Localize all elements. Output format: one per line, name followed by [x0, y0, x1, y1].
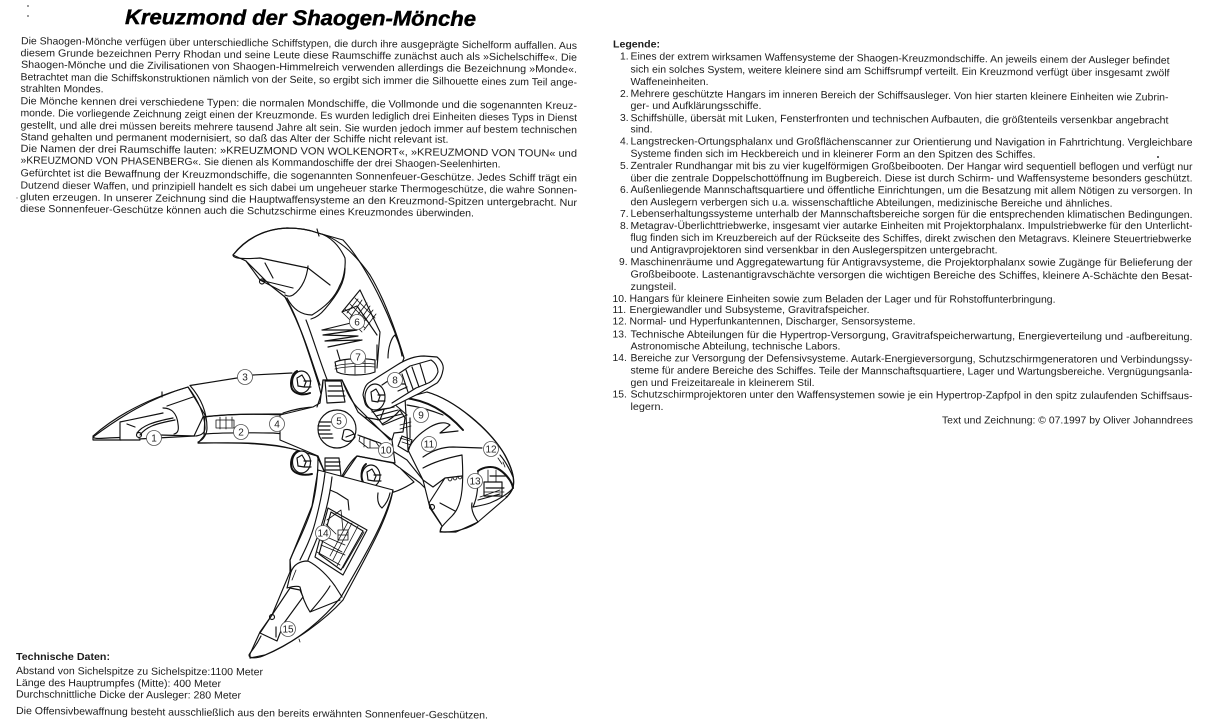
engine capsule — [363, 356, 443, 425]
legend: den Auslegern verbergen sich u.a. wissenschaftliche Abteilungen, medizinische Bereiche und ähnliches. — [630, 197, 1113, 210]
credit line: Text und Zeichnung: © 07.1997 by Oliver Johanndrees — [942, 416, 1193, 426]
legend: Mehrere geschützte Hangars im inneren Bereich der Schiffsausleger. Von hier starten kleinere Einheiten wie Zubrin- — [630, 89, 1169, 104]
legend: 8. — [620, 221, 629, 232]
legend: 12. — [612, 316, 627, 328]
legend: Metagrav-Überlichttriebwerke, insgesamt vier autarke Einheiten mit Projektorphalanx. Impulstriebwerke für den Unterlicht- — [630, 220, 1192, 232]
marker 3: 3 — [242, 372, 248, 384]
intro text block: gluten erzeugen. In unserer Zeichnung sind die Hauptwaffensysteme an den Kreuzmond-Spitzen untergebracht. Nur — [20, 192, 578, 209]
legend: flug finden sich im Kreuzbereich auf der Rückseite des Schiffes, direkt zwischen den Metagravs. Kleinere Steuertriebwerke — [630, 233, 1192, 245]
marker 11 — [422, 436, 436, 452]
legend: 7. — [620, 209, 629, 220]
legend: Großbeiboote. Lastenantigravschächte versorgen die wichtigen Bereiche des Schiffes, kleinere A-Schächte den Besat- — [630, 270, 1193, 282]
intro text block: Shaogen-Mönche und die Zivilisationen von Shaogen-Himmelreich verwenden allerdings die Bezeichnung »Monde«. — [21, 60, 577, 76]
marker 4: 4 — [274, 420, 280, 430]
legend: Maschinenräume und Aggregatewartung für Antigravsysteme, die Projektorphalanx sowie Zugänge für Belieferung der — [630, 257, 1193, 269]
technical data block — [16, 652, 264, 702]
marker 12: 12 — [485, 444, 497, 456]
legend: Langstrecken-Ortungsphalanx und Großflächenscanner zur Orientierung und Navigation in Fahrtrichtung. Vergleichbare — [630, 137, 1193, 149]
intro text block: Gefürchtet ist die Bewaffnung der Kreuzmondschiffe, die sogenannten Sonnenfeuer-Geschütze. Jedes Schiff trägt ein — [20, 168, 577, 185]
legend: 15. — [612, 390, 627, 400]
marker 2: 2 — [238, 428, 244, 438]
legend: sind. — [630, 124, 652, 136]
legend — [612, 40, 1193, 413]
legend: steme für andere Bereiche des Schiffes. Teile der Mannschaftsquartiere, Lager und Wartungsbereiche. Vergnügungsanla- — [630, 366, 1193, 378]
legend: Systeme finden sich im Heckbereich und in kleinerer Form an den Spitzen des Schiffes. — [630, 149, 1036, 161]
legend: und Antigravprojektoren sind versenkbar in den Auslegerspitzen untergebracht. — [630, 245, 998, 256]
marker 10: 10 — [380, 446, 392, 456]
legend: 5. — [620, 161, 629, 172]
intro text block: Stand gehalten und permanent modernisiert, so daß das Alter der Schiffe nicht relevant ist. — [20, 132, 449, 146]
marker 2 — [234, 424, 248, 440]
closing note: Die Offensivbewaffnung besteht ausschließlich aus den bereits erwähnten Sonnenfeuer-Geschützen. — [16, 706, 488, 722]
legend: zungsteil. — [630, 282, 676, 293]
top arm — [233, 228, 404, 420]
marker 13 — [468, 474, 482, 488]
marker 1 — [146, 430, 162, 446]
legend: 1. — [620, 52, 629, 62]
legend: 10. — [612, 294, 627, 305]
lower-left turret — [291, 451, 312, 475]
title: Kreuzmond der Shaogen-Mönche — [125, 6, 476, 31]
marker 9: 9 — [418, 410, 424, 422]
upper-left turret — [291, 371, 311, 394]
intro text block: »KREUZMOND VON PHASENBERG«. Sie dienen als Kommandoschiffe der drei Shaogen-Seelenhirten. — [20, 156, 501, 171]
legend: Lebenserhaltungssysteme unterhalb der Mannschaftsbereiche sorgen für die entsprechenden klimatischen Bedingungen. — [630, 209, 1193, 221]
intro text block: Die Shaogen-Mönche verfügen über unterschiedliche Schiffstypen, die durch ihre ausgeprägte Sichelform auffallen. Aus — [21, 36, 577, 52]
lower-right turret — [362, 464, 414, 509]
marker 12 — [484, 442, 498, 456]
intro text block: Die Namen der drei Raumschiffe lauten: »KREUZMOND VON WOLKENORT«, »KREUZMOND VON TOUN« und — [20, 144, 577, 160]
technical data block: Technische Daten: — [16, 652, 110, 663]
legend: gen und Freizeitareale in kleinerem Stil. — [630, 378, 814, 389]
marker 13: 13 — [469, 476, 481, 488]
legend: 13. — [612, 330, 627, 340]
intro text block: Betrachtet man die Schiffskonstruktionen nämlich von der Seite, so ergibt sich immer die Silhouette eines zum Teil ange- — [20, 72, 577, 89]
legend: Astronomische Abteilung, technische Labors. — [630, 342, 840, 352]
marker 7: 7 — [355, 352, 361, 364]
left arm — [93, 373, 318, 456]
legend: Hangars für kleinere Einheiten sowie zum Beladen der Lager und für Rohstoffunterbringung. — [629, 294, 1056, 306]
marker 7 — [350, 350, 366, 364]
right arm — [382, 392, 514, 532]
ship cross-section drawing — [93, 228, 514, 658]
legend heading: Legende: — [613, 40, 660, 50]
marker 15: 15 — [282, 624, 294, 636]
marker 15 — [280, 622, 296, 636]
marker 5 — [332, 414, 346, 428]
legend: Zentraler Rundhangar mit bis zu vier kugelförmigen Großbeibooten. Der Hangar wird sequentiell beflogen und verfügt nur — [630, 161, 1193, 173]
marker 8 — [388, 372, 402, 388]
legend: Normal- und Hyperfunkantennen, Discharger, Sensorsysteme. — [630, 316, 916, 328]
legend: ger- und Aufklärungsschiffe. — [630, 101, 762, 112]
legend: 14. — [612, 353, 627, 364]
legend: sich ein solches System, weitere kleinere sind am Schiffsrumpf verteilt. Ein Kreuzmond verfügt über insgesamt zwölf — [630, 65, 1170, 79]
intro text block: diesem Grunde bezeichnen Perry Rhodan und seine Leute diese Raumschiffe zunächst auch als »Sichelschiffe«. Die — [20, 48, 577, 64]
marker 14 — [316, 526, 330, 540]
legend: Energiewandler und Subsysteme, Gravitrafspeicher. — [630, 305, 870, 316]
marker 1: 1 — [151, 434, 157, 444]
legend: 11. — [612, 305, 626, 316]
marker 6 — [350, 314, 364, 330]
intro text block: Dutzend dieser Waffen, und prinzipiell handelt es sich dabei um ungeheuer starke Thermogeschütze, die wahre Sonnen- — [20, 181, 577, 197]
technical data block: Abstand von Sichelspitze zu Sichelspitze:1100 Meter — [16, 666, 264, 678]
number markers — [146, 314, 498, 636]
marker 8: 8 — [392, 376, 398, 386]
legend: Eines der extrem wirksamen Waffensysteme der Shaogen-Kreuzmondschiffe. An jeweils einem der Ausleger befindet — [630, 52, 1170, 67]
intro text block: Die Mönche kennen drei verschiedene Typen: die normalen Mondschiffe, die Vollmonde und die sogenannten Kreuz- — [20, 96, 577, 112]
intro text block: gestellt, und alle drei müssen bereits mehrere tausend Jahre alt sein. Sie wurden jedoch immer auf bestem technischen — [20, 121, 577, 136]
legend: 4. — [620, 136, 629, 148]
legend: Technische Abteilungen für die Hypertrop-Versorgung, Gravitrafspeicherwartung, Energieverteilung und -aufbereitung. — [630, 330, 1193, 343]
marker 6: 6 — [354, 318, 360, 328]
bottom arm — [249, 457, 393, 658]
marker 14: 14 — [317, 528, 329, 540]
marker 4 — [270, 416, 284, 432]
legend: legern. — [630, 402, 664, 413]
legend: 6. — [620, 185, 629, 196]
legend: Außenliegende Mannschaftsquartiere und öffentliche Einrichtungen, um die Besatzung mit allem Nötigen zu versorgen. In — [630, 185, 1193, 197]
legend: Waffeneinheiten. — [630, 77, 708, 88]
marker 9 — [414, 408, 428, 422]
intro text block: monde. Die vorliegende Zeichnung zeigt einen der Kreuzmonde. Es wurden lediglich drei Einheiten dieses Typs in Dienst — [20, 108, 577, 124]
technical data block: Durchschnittliche Dicke der Ausleger: 280 Meter — [16, 690, 242, 702]
marker 5: 5 — [336, 416, 342, 428]
marker 3 — [238, 370, 252, 384]
legend: 3. — [620, 113, 629, 124]
legend: 9. — [619, 257, 628, 268]
intro text block: strahlten Mondes. — [20, 84, 104, 95]
technical data block: Länge des Hauptrumpfes (Mitte): 400 Meter — [16, 678, 222, 690]
marker 10 — [378, 442, 394, 458]
legend: über die zentrale Doppelschottöffnung im Bugbereich. Diese ist durch Schirm- und Waffensysteme besonders geschützt. — [630, 174, 1192, 184]
central hub with four turrets — [280, 371, 432, 509]
legend: Bereiche zur Versorgung der Defensivsysteme. Autark-Energieversorgung, Schutzschirmgeneratoren und Verbindungssy- — [630, 353, 1193, 366]
legend: 2. — [620, 89, 629, 100]
intro text block: diese Sonnenfeuer-Geschütze können auch die Schutzschirme eines Kreuzmondes überwinden. — [20, 204, 474, 220]
legend: Schiffshülle, übersät mit Luken, Fensterfronten und technischen Aufbauten, die größtenteils versenkbar angebracht — [630, 113, 1169, 127]
intro text block — [20, 36, 578, 220]
marker 11: 11 — [424, 440, 435, 450]
legend: Schutzschirmprojektoren unter den Waffensystemen sowie je ein Hypertrop-Zapfpol in den spitz zulaufenden Schiffsaus- — [630, 390, 1193, 402]
